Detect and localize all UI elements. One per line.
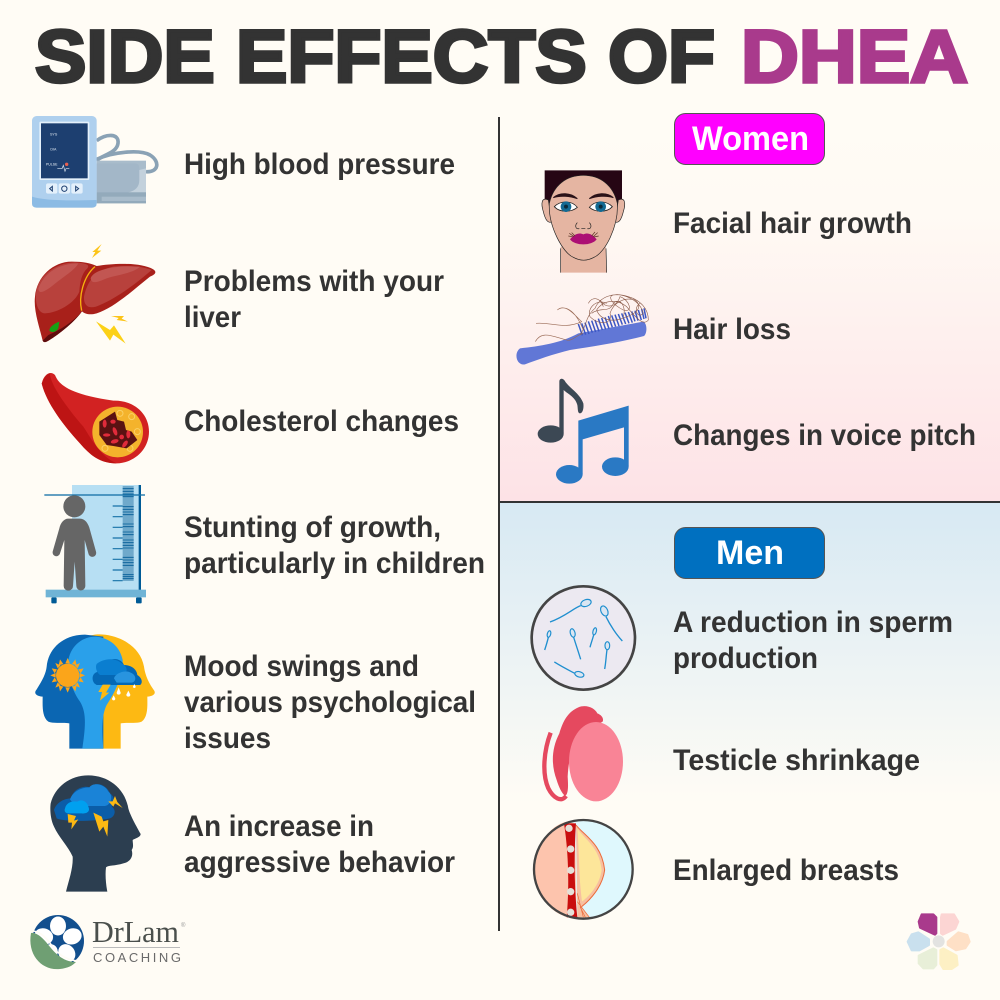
heading: women: Women: [692, 120, 809, 158]
text: stunting of growth: particularly in children: [184, 547, 485, 580]
logo: DrLam Coaching: [30, 914, 186, 969]
text: changes in voice pitch: Changes in voice pitch: [673, 419, 976, 452]
text: problems with your liver: liver: [184, 301, 241, 334]
icon: testicle: [544, 706, 623, 801]
icon: blood pressure monitor: PULSE: [46, 163, 58, 167]
text: problems with your liver: Problems with your: [184, 265, 444, 298]
icon: blood pressure monitor: [32, 116, 157, 208]
text: mood swings: issues: [184, 722, 271, 755]
text: enlarged breasts: Enlarged breasts: [673, 854, 899, 887]
icon: sperm cells: [532, 586, 635, 690]
icon: clogged artery: [42, 373, 149, 463]
heading: women: [674, 114, 824, 164]
icon: blood pressure monitor: DIA: [50, 147, 57, 151]
icon: liver: [35, 244, 155, 344]
logo: DrLam Coaching: ®: [181, 922, 186, 929]
icon: face with facial hair: [542, 170, 625, 273]
text: aggressive behavior: aggressive behavior: [184, 846, 455, 879]
text: reduction in sperm: production: [673, 642, 818, 675]
icon: music notes: [538, 379, 629, 484]
title: DHEA: [741, 15, 968, 98]
icon: mood swing heads: [35, 634, 155, 749]
text: mood swings: various psychological: [184, 686, 476, 719]
text: cholesterol changes: Cholesterol changes: [184, 405, 459, 438]
text: stunting of growth: Stunting of growth,: [184, 511, 441, 544]
panel: men background: [500, 503, 1000, 803]
text: facial hair growth: Facial hair growth: [673, 207, 912, 240]
icon: blood pressure monitor: SYS: [50, 133, 58, 137]
text: reduction in sperm: A reduction in sperm: [673, 606, 953, 639]
text: high blood pressure: High blood pressure: [184, 148, 455, 181]
heading: men: Men: [716, 534, 784, 572]
text: aggressive behavior: An increase in: [184, 810, 374, 843]
text: problems with your liver: [184, 265, 444, 334]
logo: DrLam Coaching: COACHING: [93, 950, 181, 965]
text: testicle shrinkage: Testicle shrinkage: [673, 744, 920, 777]
icon: height measure: [44, 485, 146, 603]
icon: decorative flower: [908, 914, 970, 969]
text: mood swings: [184, 650, 476, 755]
text: aggressive behavior: [184, 810, 455, 879]
text: mood swings: Mood swings and: [184, 650, 419, 683]
icon: head with storm: [50, 775, 141, 892]
logo: DrLam Coaching: DrLam: [92, 914, 179, 949]
title: SIDE EFFECTS OF: [35, 15, 715, 98]
text: reduction in sperm: [673, 606, 953, 675]
heading: men: [674, 528, 824, 578]
panel: women background: [500, 117, 1000, 502]
icon: breast cross section: [534, 820, 633, 919]
text: hair loss: Hair loss: [673, 313, 791, 346]
text: stunting of growth: [184, 511, 485, 580]
icon: hair brush: [516, 295, 648, 364]
